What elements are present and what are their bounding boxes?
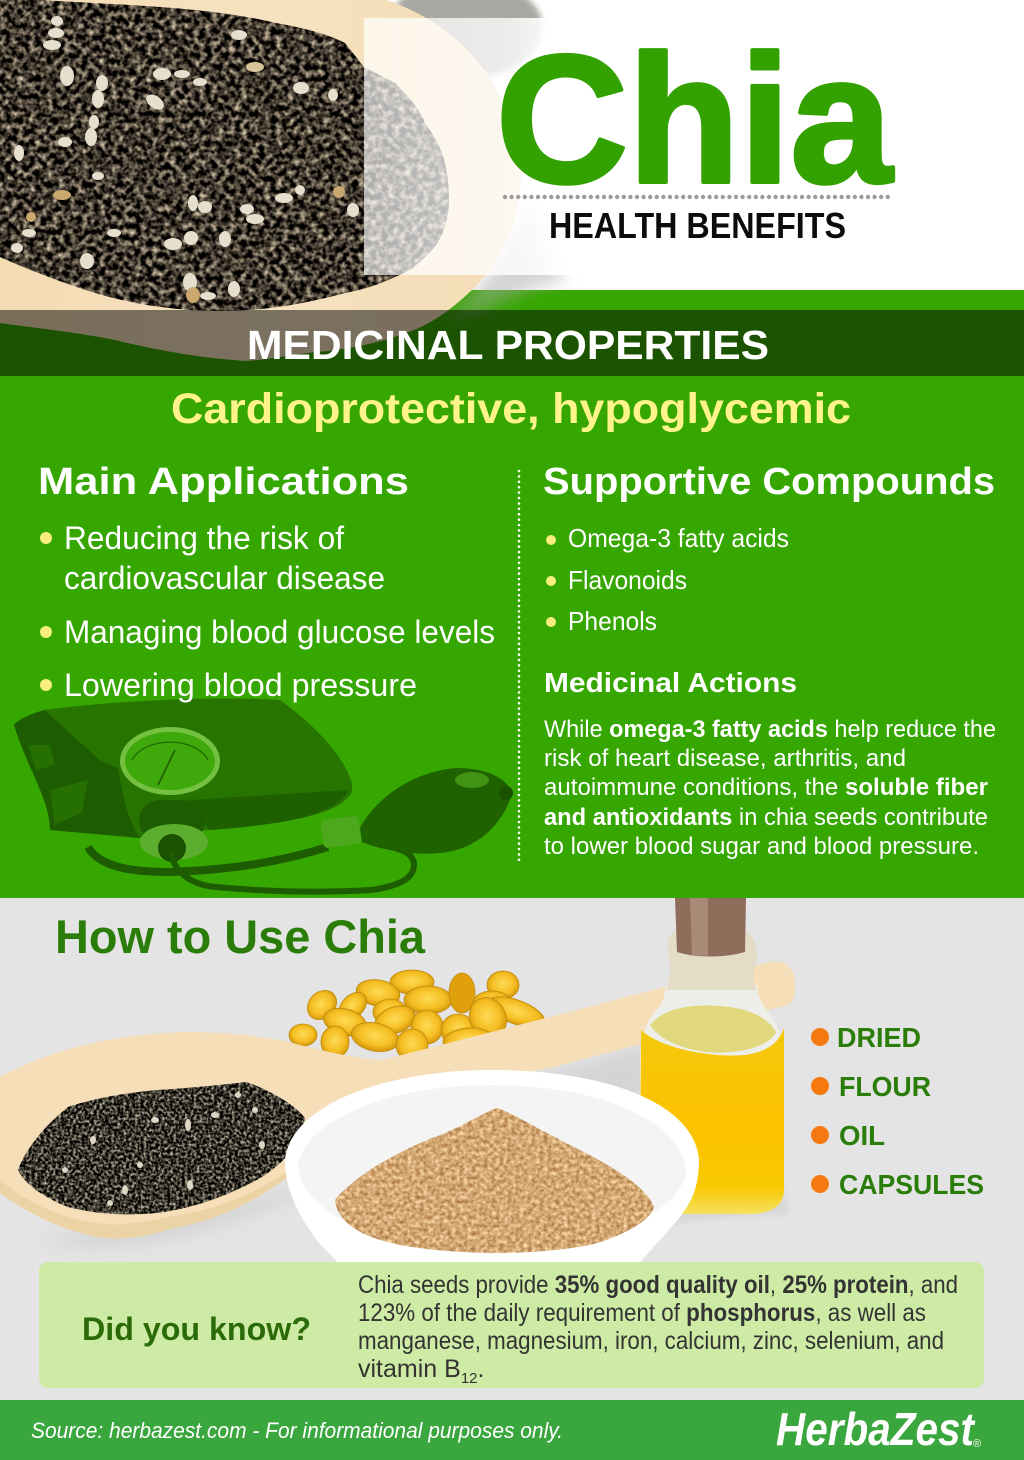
source note: Source: herbazest.com - For informational purposes only. <box>31 1418 563 1443</box>
bullet: risk of cardiovascular disease: Reducing the risk of <box>64 520 344 556</box>
title dotted divider <box>505 195 888 199</box>
subheading: properties: Cardioprotective, hypoglycemic <box>171 385 851 433</box>
column divider <box>518 471 520 862</box>
white chia seeds <box>11 16 359 303</box>
item: flour: FLOUR <box>839 1071 931 1102</box>
subtitle: health benefits: HEALTH BENEFITS <box>549 205 846 246</box>
text block: medicinal actions <box>544 716 996 860</box>
image: gel capsules <box>289 970 548 1061</box>
callout text: manganese, magnesium, iron, calcium, zinc, selenium, and <box>358 1327 944 1355</box>
translucent title panel <box>364 18 1024 275</box>
heading: medicinal actions: Medicinal Actions <box>544 667 797 698</box>
cork <box>675 898 746 956</box>
callout text <box>358 1271 958 1387</box>
oil <box>640 1028 784 1214</box>
heading: main applications: Main Applications <box>38 461 409 503</box>
bullet: risk of cardiovascular disease: cardiovascular disease <box>64 560 385 596</box>
footer <box>0 1400 1024 1460</box>
image: wooden spoon with chia seeds <box>0 961 795 1247</box>
heading: medicinal properties: MEDICINAL PROPERTIES <box>247 322 769 368</box>
callout text: vitamin B <box>358 1355 461 1383</box>
callout text: . <box>478 1355 484 1383</box>
callout: did you know <box>39 1262 984 1388</box>
callout heading: Did you know? <box>82 1311 311 1347</box>
list: forms of use <box>811 1022 984 1200</box>
bullet: blood pressure: Lowering blood pressure <box>64 667 417 703</box>
text block: medicinal actions: and antioxidants in chia seeds contribute <box>544 804 988 831</box>
callout text: 123% of the daily requirement of phosphorus, as well as <box>358 1299 926 1327</box>
bullet: blood glucose: Managing blood glucose levels <box>64 614 495 650</box>
item: oil: OIL <box>839 1120 885 1151</box>
item: oil <box>811 1120 885 1151</box>
image: bottle of chia oil <box>640 898 790 1225</box>
image: blood pressure monitor <box>14 698 513 892</box>
gauge <box>120 727 220 795</box>
compound: phenols: Phenols <box>568 606 657 636</box>
text block: medicinal actions: autoimmune conditions, the soluble fiber <box>544 774 988 801</box>
item: capsules: CAPSULES <box>839 1169 984 1200</box>
title: Chia: Chia <box>496 17 894 221</box>
bulb <box>320 815 362 848</box>
heading: how to use chia: How to Use Chia <box>55 910 426 963</box>
panel: medicinal properties <box>0 376 1024 898</box>
compound: omega-3: Omega-3 fatty acids <box>568 523 789 553</box>
text block: medicinal actions: to lower blood sugar and blood pressure. <box>544 833 979 860</box>
supportive compounds column <box>543 461 996 860</box>
header photo: chia seeds on wooden spoon <box>0 0 565 361</box>
image: bowl of chia flour <box>285 1070 699 1270</box>
compound: flavonoids: Flavonoids <box>568 565 687 595</box>
main applications column <box>38 461 495 703</box>
item: dried: DRIED <box>837 1022 921 1053</box>
white seeds on spoon <box>62 1092 265 1206</box>
heading: supportive compounds: Supportive Compounds <box>543 461 995 503</box>
logo: HerbaZest: HerbaZest <box>776 1403 975 1455</box>
tubing <box>88 847 328 872</box>
panel: how to use <box>0 898 1024 1400</box>
section band shade <box>0 310 1024 376</box>
callout text: Chia seeds provide 35% good quality oil, 25% protein, and <box>358 1271 958 1299</box>
registered mark: ® <box>973 1438 981 1450</box>
glass neck <box>666 932 757 990</box>
glass body <box>640 985 784 1214</box>
bullet: risk of cardiovascular disease <box>40 520 385 596</box>
green band behind section header <box>0 290 1024 376</box>
text block: medicinal actions: risk of heart disease, arthritis, and <box>544 745 906 772</box>
text block: medicinal actions: While omega-3 fatty acids help reduce the <box>544 716 996 743</box>
callout text: 12 <box>461 1370 478 1387</box>
